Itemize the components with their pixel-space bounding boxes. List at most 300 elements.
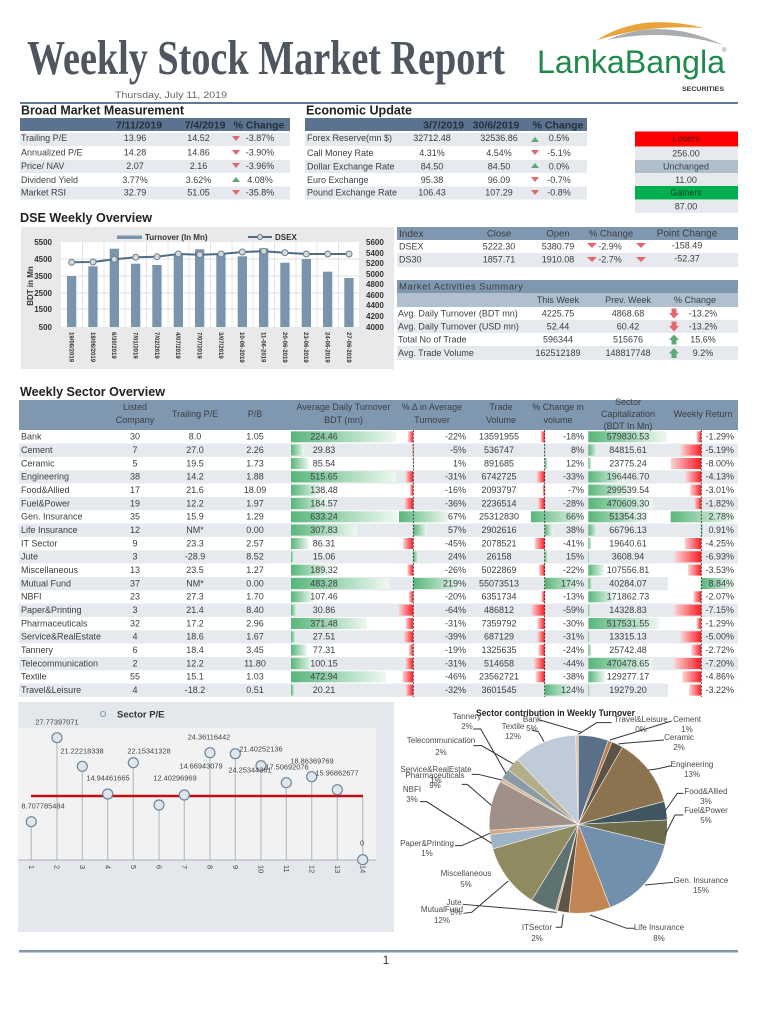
row: Dollar Exchange Rate (307, 162, 569, 172)
row: Paper&Printing: -59% (563, 605, 584, 615)
row: Miscellaneous: -26% (445, 565, 466, 575)
row: Annualized P/E: 14.86 (187, 148, 210, 158)
row: Travel&Leisure: 3601545 (481, 685, 517, 695)
row: turnover BDT: Avg. Daily Turnover (BDT mn) (398, 308, 518, 318)
row: Bank: 13591955 (479, 432, 519, 442)
table header: Volume (486, 415, 516, 425)
row: Mutual Fund: 8.84% (708, 578, 734, 588)
row: Food&Allied: -7% (568, 485, 584, 495)
row: Food&Allied: -3.01% (705, 485, 734, 495)
table header: % Change in (532, 402, 584, 412)
row: Mutual Fund: 174% (561, 578, 584, 588)
row: Market RSI: Market RSI (21, 188, 66, 198)
row: Gen. Insurance: 35 (130, 512, 140, 522)
data labels (21, 718, 364, 848)
row: Pharmaceuticals: 17.2 (186, 618, 204, 628)
x axis labels: 2 (53, 865, 62, 869)
row: Bank: -1.29% (705, 432, 734, 442)
row: Textile: -46% (445, 672, 466, 682)
row: Telecommunication (19, 657, 738, 670)
row: DSEX: -158.49 (672, 240, 702, 250)
row: Service&RealEstate: 27.51 (313, 632, 335, 642)
row: Ceramic: 19.5 (186, 458, 204, 468)
y axis: turnover: 3500 (34, 272, 53, 281)
bars: turnover (67, 248, 354, 327)
row: Pharmaceuticals: Pharmaceuticals (21, 618, 88, 628)
row: Travel&Leisure: Travel&Leisure (21, 685, 81, 695)
table header: Company (116, 415, 155, 425)
logo: LankaBangla Securities: ® (722, 47, 727, 54)
row: DSEX: DSEX (399, 242, 424, 252)
table header: % Δ in Average (402, 402, 462, 412)
row: Tannery: 6 (132, 645, 138, 655)
y axis: DSEX: 4000 (366, 323, 384, 332)
row: Life Insurance: 66796.13 (609, 525, 647, 535)
row: Food&Allied: 18.09 (244, 485, 266, 495)
row: Cement: 536747 (484, 445, 514, 455)
row: Engineering: Engineering (21, 472, 69, 482)
row: Life Insurance: 12 (130, 525, 140, 535)
row: Annualized P/E (21, 148, 274, 158)
x axis labels: 12 (307, 865, 316, 873)
table: Market Activities Summary: % Change (674, 295, 716, 305)
row: Fuel&Power (19, 497, 738, 510)
data labels: 21.22218338 (60, 746, 104, 756)
table: Broad Market Measurement (20, 118, 290, 200)
row: Fuel&Power: -28% (563, 498, 584, 508)
row: Market RSI: -35.8% (246, 188, 274, 198)
row: Fuel&Power: 2236514 (481, 498, 517, 508)
row: NBFI: 107.46 (310, 592, 338, 602)
data labels: 21.40252136 (239, 744, 283, 754)
row: Gen. Insurance: 1.29 (246, 512, 264, 522)
row: Jute: 15% (566, 552, 584, 562)
y axis: DSEX: 5200 (366, 259, 384, 268)
pie labels: 9% (429, 781, 441, 790)
pie labels: 5% (526, 724, 538, 733)
row: turnover BDT: -13.2% (689, 308, 717, 318)
row: Food&Allied: -16% (445, 485, 466, 495)
row: Pharmaceuticals: 371.48 (310, 618, 338, 628)
pie labels (400, 712, 729, 943)
row: DS30: -2.7% (598, 254, 622, 264)
row: Jute: 15.06 (313, 552, 335, 562)
y axis: DSEX: 4600 (366, 291, 384, 300)
row: Engineering: -33% (563, 472, 584, 482)
pie labels: 5% (460, 880, 472, 889)
data labels: 14.66943079 (179, 762, 223, 770)
row: Pharmaceuticals: 2.96 (246, 618, 264, 628)
x axis dates: 19/06/2019 (68, 332, 74, 363)
row: Price/NAV: Price/ NAV (21, 161, 64, 171)
row: Call Money Rate: 4.54% (486, 148, 512, 158)
panel: Sector P/E chart (18, 702, 394, 932)
row: Cement: 27.0 (186, 445, 204, 455)
row: Annualized P/E: Annualized P/E (21, 148, 83, 158)
x axis labels: 7 (180, 865, 189, 869)
row: Life Insurance (19, 524, 738, 537)
table header: Trailing P/E (172, 409, 218, 419)
row: Pharmaceuticals: -1.29% (705, 618, 734, 628)
pie labels: 12% (505, 732, 521, 741)
row: Pound Exchange Rate: 107.29 (485, 188, 513, 198)
bottom rule (19, 950, 738, 952)
pie labels: Gen. Insurance (674, 876, 729, 885)
row: Ceramic: 891685 (484, 458, 514, 468)
row: DSEX: 5222.30 (483, 242, 515, 252)
pie labels: Telecommunication (407, 736, 475, 745)
row: Gen. Insurance: 633.24 (310, 512, 338, 522)
table header (19, 397, 738, 431)
panel: market breadth: 87.00 (675, 202, 697, 212)
pie labels: 8% (653, 934, 665, 943)
data labels: 24.36116442 (188, 732, 230, 742)
table: Market Activities Summary (397, 280, 738, 360)
row: DS30: 1910.08 (542, 254, 574, 264)
row: Forex Reserve (307, 133, 569, 143)
pie slices (489, 735, 667, 913)
logo: LankaBangla Securities (537, 22, 727, 93)
x axis dates: 4/07/2019 (174, 332, 180, 359)
x axis labels: 3 (78, 865, 87, 869)
row: Paper&Printing (19, 604, 738, 617)
row: trade volume: 9.2% (693, 348, 713, 358)
pie labels: Bank (523, 715, 542, 724)
table: index: Point Change (657, 228, 718, 240)
row: Price/NAV: -3.96% (246, 161, 274, 171)
row: Ceramic: 85.54 (313, 458, 335, 468)
row: Engineering: 1.88 (246, 472, 264, 482)
row: Mutual Fund: 40284.07 (609, 578, 647, 588)
row: Miscellaneous: Miscellaneous (21, 565, 79, 575)
row: Food&Allied: 2093797 (481, 485, 517, 495)
table: Economic Update: 30/6/2019 (473, 120, 520, 132)
row: Jute: -6.93% (705, 552, 734, 562)
row: Miscellaneous: 5022869 (481, 565, 517, 575)
row: Gen. Insurance: 25312830 (479, 512, 519, 522)
row: Cement: 84815.61 (609, 445, 647, 455)
logo: LankaBangla Securities: SECURITIES (682, 87, 724, 93)
row: Food&Allied (21, 485, 734, 496)
table header: Turnover (414, 415, 450, 425)
x axis dates: 7/02/2019 (153, 332, 159, 359)
table header: (BDT In Mn) (604, 421, 652, 431)
table: Market Activities Summary: Market Activities Summary (399, 282, 523, 292)
row: Bank: 579830.53 (607, 432, 649, 442)
data labels: 8.707785484 (21, 802, 65, 810)
row: Food&Allied: 138.48 (310, 485, 338, 495)
pie labels: 0% (635, 725, 647, 734)
table: index (397, 227, 738, 267)
panel: market breadth: Gainers (670, 188, 702, 198)
table: Broad Market Measurement: 7/11/2019 (116, 120, 162, 132)
row: Miscellaneous: 1.27 (246, 565, 264, 575)
panel: market breadth (635, 132, 738, 213)
table header: Trade (489, 402, 513, 412)
row: trade volume (398, 348, 713, 358)
data labels: 12.40296969 (153, 774, 197, 782)
row: Paper&Printing: 21.4 (186, 605, 204, 615)
row: Travel&Leisure: -32% (445, 685, 466, 695)
row: Pharmaceuticals: 32 (130, 618, 140, 628)
row: Call Money Rate: -5.1% (547, 148, 571, 158)
pie labels: 1% (681, 725, 693, 734)
pie labels: Food&Allied (684, 787, 728, 796)
table header: Average Daily Turnover (297, 402, 390, 412)
row: Telecommunication: -7.20% (705, 658, 734, 668)
row: Life Insurance: NM* (186, 525, 204, 535)
row: Tannery: -24% (563, 645, 584, 655)
row: Jute: -28.9 (185, 552, 205, 562)
row: Telecommunication: 12.2 (186, 658, 204, 668)
data labels: 22.15341328 (127, 746, 171, 756)
heading: Weekly Sector Overview: Weekly Sector Overview (20, 385, 165, 399)
row: total trades: 596344 (543, 334, 573, 344)
pie labels: 3% (700, 797, 712, 806)
x axis dates: 6/30/2019 (110, 332, 116, 359)
row: NBFI: 171862.73 (607, 592, 649, 602)
date: Thursday, July 11, 2019 (115, 90, 227, 101)
row: total trades: 515676 (613, 334, 643, 344)
pie labels: ITSector (522, 923, 552, 932)
x axis dates: 18/06/2019 (89, 332, 95, 363)
row: Telecommunication: -44% (563, 658, 584, 668)
row: Pound Exchange Rate: 106.43 (418, 188, 446, 198)
row: Engineering: 515.65 (310, 472, 338, 482)
x axis dates: 24-06-2019 (324, 332, 330, 363)
row: Travel&Leisure: -18.2 (185, 685, 205, 695)
pie labels: Fuel&Power (684, 806, 728, 815)
row: Dollar Exchange Rate: 84.50 (488, 162, 510, 172)
pie title: Sector contribution in Weekly Turnover (476, 708, 635, 718)
row: trade volume: 162512189 (535, 348, 581, 358)
row: Trailing P/E (21, 133, 274, 143)
y axis: turnover: 500 (39, 323, 53, 332)
pie labels: 2% (435, 748, 447, 757)
page number: 1 (383, 953, 390, 967)
table header: BDT (mn) (324, 415, 363, 425)
row: Miscellaneous: 189.32 (310, 565, 338, 575)
row: Jute: Jute (21, 552, 38, 562)
row: Food&Allied: 21.6 (186, 485, 204, 495)
pie labels: Jute (446, 898, 462, 907)
row: Engineering: 6742725 (481, 472, 517, 482)
y axis: DSEX: 5400 (366, 249, 384, 258)
row: Pharmaceuticals: 517531.55 (607, 618, 649, 628)
row: total trades (398, 334, 716, 344)
y axis: turnover: 5500 (34, 238, 53, 247)
row: Euro Exchange: 96.09 (488, 175, 510, 185)
row: Cement: 2.26 (246, 445, 264, 455)
row: Life Insurance: 0.00 (246, 525, 264, 535)
row: Dividend Yield: 4.08% (247, 175, 273, 185)
x axis dates: 11-06-2019 (260, 332, 266, 363)
row: Dividend Yield: Dividend Yield (21, 175, 78, 185)
x axis labels: 5 (129, 865, 138, 869)
row: Miscellaneous: 13 (130, 565, 140, 575)
pie labels: 1% (421, 849, 433, 858)
row: Paper&Printing: -7.15% (705, 605, 734, 615)
x axis labels: 14 (358, 865, 367, 873)
row: Cement: 8% (571, 445, 584, 455)
row: DS30: DS30 (399, 254, 422, 264)
row: Dividend Yield: 3.62% (186, 175, 211, 185)
row: total trades: Total No of Trade (398, 334, 467, 344)
row: Gen. Insurance: Gen. Insurance (21, 512, 83, 522)
row: Fuel&Power: 12.2 (186, 498, 204, 508)
row: Bank: Bank (21, 432, 42, 442)
row: IT Sector: 9 (132, 538, 138, 548)
row: Dividend Yield: 3.77% (122, 175, 148, 185)
pie labels: NBFI (403, 785, 421, 794)
x axis labels (27, 865, 367, 873)
row: Gen. Insurance (21, 511, 734, 522)
row: Euro Exchange (307, 175, 571, 185)
table: Market Activities Summary: Prev. Week (605, 295, 651, 305)
table header: Weekly Return (674, 409, 732, 419)
markers (26, 733, 368, 865)
x axis labels: 4 (103, 865, 112, 869)
row: Textile: Textile (21, 672, 47, 682)
row: Life Insurance: 0.91% (708, 525, 734, 535)
row: Fuel&Power: 470609.30 (607, 498, 649, 508)
row: Textile: 129277.17 (607, 672, 649, 682)
row: Bank: -18% (563, 432, 584, 442)
row: IT Sector: 19640.61 (609, 538, 647, 548)
row: Pound Exchange Rate: Pound Exchange Rate (307, 188, 397, 198)
row: Pharmaceuticals: 7359792 (481, 618, 517, 628)
row: Dollar Exchange Rate: 0.0% (549, 162, 569, 172)
pie labels: Cement (673, 715, 702, 724)
y axis title: BDT in Mn (26, 266, 35, 306)
axis (18, 859, 376, 861)
row: turnover BDT: 4868.68 (612, 308, 644, 318)
pie labels: Life Insurance (634, 923, 685, 932)
row: Mutual Fund: 0.00 (246, 578, 264, 588)
row: Forex Reserve: 32536.86 (480, 133, 518, 143)
data labels: 0 (360, 838, 364, 848)
x axis labels: 6 (155, 865, 164, 869)
row: Travel&Leisure (19, 684, 738, 697)
row: Fuel&Power: 1.97 (246, 498, 264, 508)
row: Service&RealEstate (19, 630, 738, 644)
line: DSEX (69, 248, 352, 265)
x axis dates: 7/01/2019 (132, 332, 138, 359)
row: Service&RealEstate: 18.6 (186, 632, 204, 642)
row: Miscellaneous: 107556.81 (607, 565, 649, 575)
row: Food&Allied: 17 (130, 485, 140, 495)
row: Telecommunication: 514658 (484, 658, 514, 668)
row: IT Sector: -41% (563, 538, 584, 548)
row: DSEX: 5380.79 (542, 242, 574, 252)
row: Trailing P/E: 14.52 (187, 133, 210, 143)
chart: DSE turnover and DSEX (21, 227, 394, 369)
row: Paper&Printing: 8.40 (246, 605, 264, 615)
pie labels: Textile (502, 722, 525, 731)
row: Paper&Printing: 14328.83 (609, 605, 647, 615)
row: Forex Reserve: 32712.48 (413, 133, 451, 143)
row: DS30: 1857.71 (483, 254, 515, 264)
row: trade volume: 148817748 (605, 348, 651, 358)
row: Bank: 30 (130, 432, 140, 442)
pie labels: Engineering (671, 760, 713, 769)
row: Bank (21, 431, 734, 442)
row: Travel&Leisure: 19279.20 (609, 685, 647, 695)
row: Tannery: 18.4 (186, 645, 204, 655)
row: IT Sector: 86.31 (313, 538, 335, 548)
row: Telecommunication: Telecommunication (21, 658, 98, 668)
row: NBFI: NBFI (21, 592, 42, 602)
row: Gen. Insurance: 67% (448, 512, 466, 522)
table: index: Index (399, 229, 423, 240)
row: Service&RealEstate: -31% (563, 632, 584, 642)
y axis: DSEX (366, 238, 384, 332)
row: DSEX: -2.9% (598, 242, 622, 252)
y axis: DSEX: 5000 (366, 270, 384, 279)
chart: Sector contribution pie (400, 708, 729, 943)
row: Travel&Leisure: -3.22% (705, 685, 734, 695)
row: Textile: 1.03 (246, 672, 264, 682)
row: Jute: 3 (132, 552, 138, 562)
row: Market RSI: 51.05 (187, 188, 210, 198)
data labels: 15.96862677 (315, 768, 359, 778)
row: Bank: 8.0 (189, 432, 201, 442)
row: Mutual Fund: 37 (130, 578, 140, 588)
row: Paper&Printing: -64% (445, 605, 466, 615)
row: Telecommunication: 100.15 (310, 658, 338, 668)
row: Price/NAV: 2.07 (126, 161, 144, 171)
row: Mutual Fund: Mutual Fund (21, 578, 71, 588)
row: IT Sector: -4.25% (705, 538, 734, 548)
row: NBFI: 6351734 (481, 592, 517, 602)
row: Service&RealEstate: 687129 (484, 632, 514, 642)
row: turnover USD: Avg. Daily Turnover (USD mn) (398, 322, 519, 332)
row: IT Sector: 23.3 (186, 538, 204, 548)
row: Mutual Fund: 219% (443, 578, 466, 588)
row: Euro Exchange: Euro Exchange (307, 175, 369, 185)
x axis labels: 1 (27, 865, 36, 869)
y axis: turnover (34, 238, 53, 332)
row: IT Sector: 2.57 (246, 538, 264, 548)
row: Travel&Leisure: 124% (561, 685, 584, 695)
row: Pharmaceuticals: -31% (445, 618, 466, 628)
row: Telecommunication: 11.80 (244, 658, 266, 668)
row: Miscellaneous (21, 565, 734, 576)
row: Engineering: 38 (130, 472, 140, 482)
average line (31, 795, 363, 797)
row: Textile: 55 (130, 672, 140, 682)
row: Fuel&Power: -36% (445, 498, 466, 508)
row: turnover BDT: 4225.75 (542, 308, 574, 318)
row: Dividend Yield (21, 175, 273, 185)
row: Tannery: -2.72% (705, 645, 734, 655)
row: Paper&Printing: 486812 (484, 605, 514, 615)
row: Jute: 3608.94 (612, 552, 644, 562)
row: Jute (19, 550, 738, 564)
row: Trailing P/E: -3.87% (246, 133, 274, 143)
row: NBFI (21, 591, 734, 602)
row: total trades: 15.6% (690, 334, 716, 344)
pie labels: 13% (684, 770, 700, 779)
row: Life Insurance: 307.83 (310, 525, 338, 535)
row: Service&RealEstate: -5.00% (705, 632, 734, 642)
heading: Economic Update: Economic Update (306, 104, 412, 118)
row: Tannery: -19% (445, 645, 466, 655)
row: Call Money Rate: 4.31% (419, 148, 445, 158)
row: Gen. Insurance: 66% (566, 512, 584, 522)
row: turnover BDT (398, 308, 717, 318)
row: Miscellaneous: -22% (563, 565, 584, 575)
